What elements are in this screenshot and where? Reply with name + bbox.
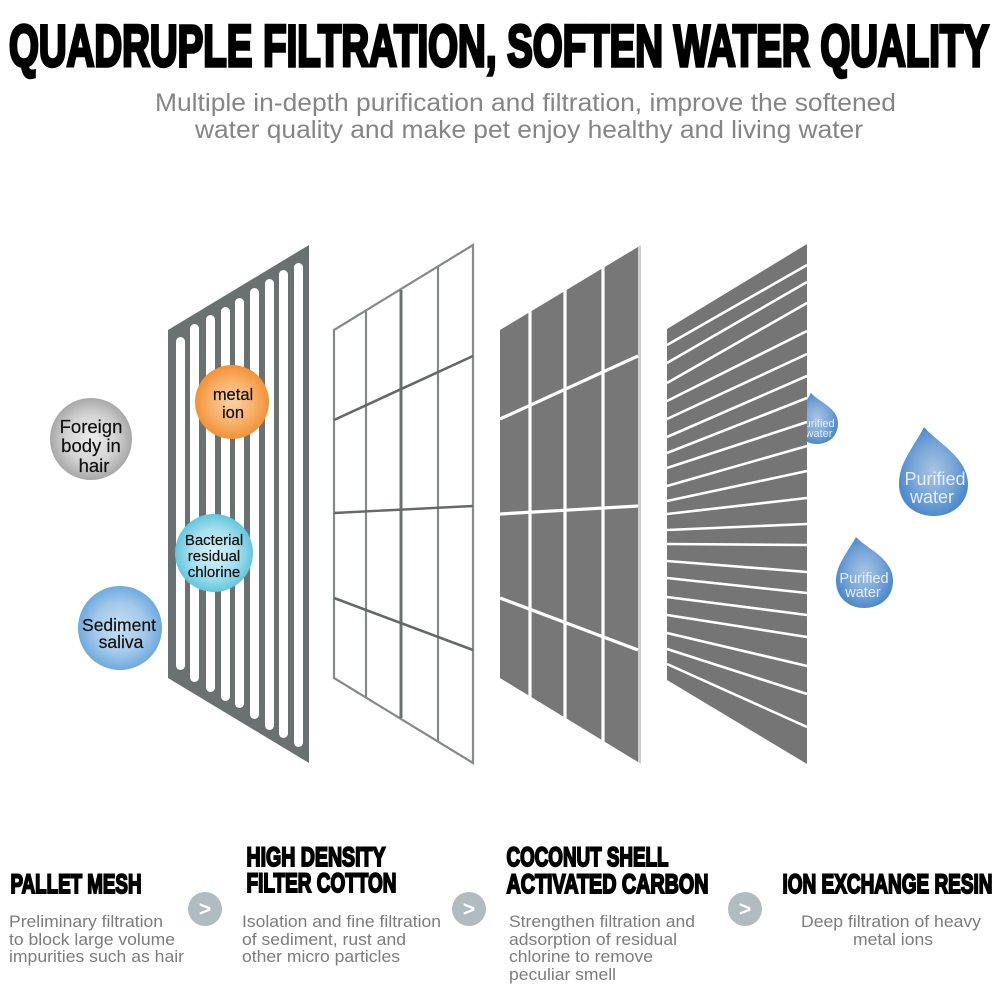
arrow: step three to four: > xyxy=(739,898,751,921)
step: pallet mesh xyxy=(9,869,184,966)
text: pallet mesh description xyxy=(9,912,184,966)
heading: pallet mesh: PALLET MESH xyxy=(10,869,142,899)
circle: foreign body in hair: body in xyxy=(61,435,121,456)
step: high density filter cotton xyxy=(242,842,441,966)
text: ion exchange description xyxy=(801,912,982,949)
circle: bacterial residual chlorine: residual xyxy=(188,548,240,565)
icon: middle water drop: water xyxy=(844,585,881,601)
icon: large water drop: Purified xyxy=(904,469,966,489)
step: ion exchange resin xyxy=(782,869,992,949)
text: activated carbon description: Strengthen filtration and xyxy=(509,912,695,931)
text: filter cotton description: other micro particles xyxy=(242,947,400,966)
text: activated carbon description: chlorine to remove xyxy=(509,947,653,966)
arrow: step one to two: > xyxy=(199,898,211,921)
circle: metal ion xyxy=(195,365,269,439)
panel: high density filter cotton xyxy=(334,245,473,763)
text: activated carbon description: peculiar smell xyxy=(509,965,616,984)
arrow: step three to four xyxy=(728,892,762,926)
panel: pallet mesh filter xyxy=(168,245,309,763)
circle: metal ion: metal xyxy=(213,386,253,404)
text: pallet mesh description: to block large volume xyxy=(9,930,175,949)
subtitle: Multiple in-depth purification and filtration, improve the softened xyxy=(155,89,896,117)
text: ion exchange description: metal ions xyxy=(853,930,933,949)
subtitle xyxy=(155,89,896,144)
heading: coconut shell activated carbon: COCONUT SHELL xyxy=(506,842,668,872)
circle: sediment saliva xyxy=(78,586,162,670)
circle: bacterial residual chlorine xyxy=(175,514,253,592)
heading: high density filter cotton: FILTER COTTON xyxy=(246,868,396,898)
icon: small water drop at filter edge xyxy=(807,393,838,444)
text: pallet mesh description: impurities such as hair xyxy=(9,947,184,966)
arrow: step two to three xyxy=(452,892,486,926)
heading: high density filter cotton xyxy=(246,842,396,898)
text: filter cotton description xyxy=(242,912,441,966)
icon: middle water drop xyxy=(836,537,893,608)
circle: foreign body in hair: hair xyxy=(79,455,109,476)
circle: bacterial residual chlorine: Bacterial xyxy=(185,532,243,549)
panel: ion exchange resin xyxy=(667,244,807,764)
heading: coconut shell activated carbon xyxy=(506,842,708,899)
arrow: step one to two xyxy=(188,892,222,926)
icon: small water drop at filter edge: Purified xyxy=(797,418,835,430)
icon: small water drop at filter edge: water xyxy=(805,428,833,440)
text: pallet mesh description: Preliminary filtration xyxy=(9,912,163,931)
icon: large water drop xyxy=(899,427,968,516)
icon: large water drop: water xyxy=(909,487,954,507)
subtitle: water quality and make pet enjoy healthy and living water xyxy=(194,116,863,144)
text: activated carbon description xyxy=(509,912,695,984)
arrow: step two to three: > xyxy=(463,898,475,921)
circle: sediment saliva: Sediment xyxy=(82,615,156,635)
panel: coconut shell activated carbon xyxy=(500,245,641,764)
circle: foreign body in hair: Foreign xyxy=(60,416,122,437)
heading: high density filter cotton: HIGH DENSITY xyxy=(246,842,386,872)
text: activated carbon description: adsorption of residual xyxy=(509,930,677,949)
text: filter cotton description: Isolation and fine filtration xyxy=(242,912,441,931)
circle: metal ion: ion xyxy=(222,404,244,422)
icon: middle water drop: Purified xyxy=(839,571,889,587)
step: coconut shell activated carbon xyxy=(506,842,708,984)
circle: sediment saliva: saliva xyxy=(99,632,144,652)
circle: foreign body in hair xyxy=(50,398,132,480)
text: filter cotton description: of sediment, rust and xyxy=(242,930,406,949)
heading: coconut shell activated carbon: ACTIVATED CARBON xyxy=(506,869,708,899)
circle: bacterial residual chlorine: chlorine xyxy=(188,564,240,581)
text: ion exchange description: Deep filtration of heavy xyxy=(801,912,982,931)
